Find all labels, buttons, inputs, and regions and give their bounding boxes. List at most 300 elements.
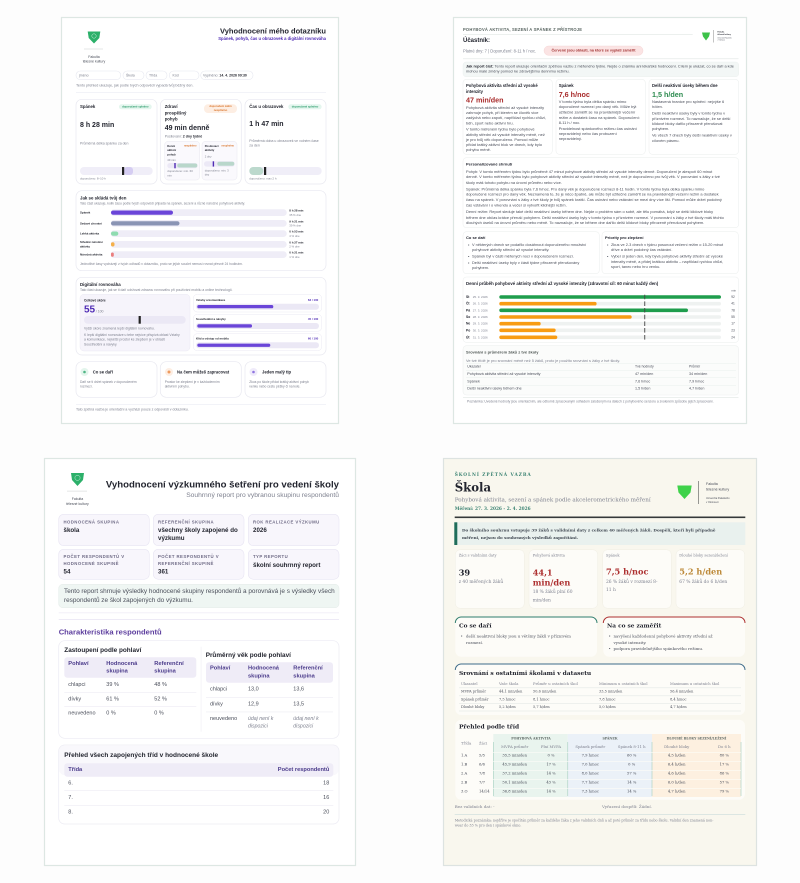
panel: personalised summary: [463, 158, 739, 228]
table: average age: dispozici: [248, 723, 269, 729]
info card: respondents in reference: POČET RESPONDENTŮ V: [158, 554, 219, 559]
table: school comparison: Průměr: [689, 364, 701, 368]
info card: year: ROK REALIZACE VÝZKUMU: [253, 520, 320, 524]
title: Škola: [455, 480, 491, 494]
card: strengths: [455, 617, 597, 657]
table: average age: dívky: [210, 702, 223, 708]
table: school comparison: Ukazatel: [467, 364, 481, 368]
bar: moderate activity: [80, 240, 304, 249]
card: physical activity: nesplněno: [214, 108, 228, 112]
table: overview by class: [455, 720, 745, 800]
table row 1.A: 1.A: [461, 754, 468, 758]
methodology note: [455, 817, 713, 827]
KPI: valid pupils: 39: [459, 567, 470, 577]
card: screen time: doporučeno: max 2 h: [249, 176, 277, 180]
KPI: sleep: Spánek: [606, 554, 620, 558]
info card: group: HODNOCENÁ SKUPINA: [64, 520, 119, 524]
sub-card: strength activity: dny: [205, 173, 210, 177]
panel: personalised summary: Spánek: Průměrná délka spánku byla 7,6 h/noc. Pro daný věk je doporučené rozmezí 8-11 hodin. V tomto týdnu byla délka spánku mimo: [466, 186, 705, 192]
table row 2.A: 2.A: [461, 772, 468, 776]
card: sleep: doporučené rozmezí pro daný věk. Může být: [559, 104, 637, 109]
subscore: relationships: 63 / 100: [308, 298, 319, 302]
bar: light activity: Lehká aktivita: [80, 232, 100, 236]
card: strengths: delší neaktivní bloky jsou u většiny žáků v příznivém: [466, 634, 571, 638]
subscore: phone distance: [193, 334, 322, 351]
table: overview by class: Plní MVPA: [541, 744, 561, 749]
how to read box: mohou malé změny pomoci ke zdravějšímu dennímu režimu.: [466, 70, 570, 74]
table: classes overview: [59, 745, 339, 824]
table: gender share: Zastoupení podle pohlaví: [64, 647, 142, 654]
chart: daily MVPA: 25. 3. 2026: [473, 295, 488, 299]
table: average age: 13,0: [248, 687, 259, 693]
title: Vyhodnocení mého dotazníku: [220, 26, 326, 36]
panel: digital balance: Tato část ukazuje, jak se ti daří udržovat zdravou rovnováhu při používání mobilu a online technologií.: [80, 288, 233, 292]
info card: respondents in group: [59, 549, 149, 579]
table row 1.A: 7,9 h/noc: [582, 754, 599, 758]
table row 1.A: 80 %: [720, 754, 729, 758]
card: sleep: Průměrná délka spánku za den: [80, 141, 128, 145]
participant: Účastník:: [463, 37, 490, 44]
table: school comparison: Delší neaktivní úseky během dne: [467, 387, 522, 391]
table row 3.O: 79 %: [720, 789, 729, 793]
card: focus areas: navýšení každodenní pohybové aktivity střední až: [614, 634, 713, 638]
table: average age: Referenční: [293, 666, 323, 672]
chart: daily MVPA: Po: [466, 328, 470, 332]
how to read box: [463, 62, 739, 77]
card: screen time: Čas u obrazovek: [249, 104, 284, 109]
card: MVPA: [463, 79, 552, 154]
card: what goes well: rozmezí.: [80, 385, 93, 389]
card: physical activity: Posilování: 2 dny týdně: [165, 135, 202, 139]
card: focus areas: •: [608, 646, 611, 651]
table: gender share: 0 %: [154, 711, 164, 717]
total score: Soustředění a návyky.: [84, 342, 117, 346]
subscore: focus: 45 / 100: [308, 317, 319, 321]
table: classes overview: Třída: [68, 767, 83, 773]
card: priorities: [602, 232, 738, 274]
table: school comparison: Pohybová aktivita střední až vysoké intenzity: [467, 372, 541, 376]
table: school comparison: 44,1 min/den: [499, 690, 523, 694]
intro text: Tento přehled ukazuje, jak podle tvých odpovědí vypadá tvůj běžný den.: [76, 84, 193, 88]
panel: device activity report: [454, 18, 746, 424]
table: average age: údaj není k: [248, 716, 274, 722]
table row 2.A: 14 %: [546, 772, 556, 776]
table: overview by class: Třída: [461, 740, 472, 746]
sub-card: daily activity: 49 min: [167, 158, 176, 162]
card: strengths: pohybové aktivity střední až vysoké intenzity.: [472, 247, 549, 252]
table row 1.A: 5/5: [479, 754, 486, 758]
card: sleep: Pravidelnost spánkového režimu čas usínání: [559, 126, 638, 131]
chart: daily MVPA: Ne: [466, 322, 470, 326]
card: MVPA: Pohybová aktivita střední až vysoké intenzity: [466, 105, 544, 110]
bar: light activity: 0 h 53 min: [289, 230, 304, 234]
card: sleep: Spánek: [559, 83, 574, 88]
title: Vyhodnocení výzkumného šetření pro vedení školy: [106, 480, 340, 490]
table: school comparison: Dlouhé bloky: [461, 705, 484, 709]
card: focus areas: •: [608, 634, 611, 638]
card: physical activity: prospěšný: [165, 110, 187, 116]
KPI: sleep: 7,5 h/noc: [606, 567, 648, 577]
table: school comparison: 4,7 h/den: [689, 387, 704, 391]
table row 3.O: 14 %: [627, 789, 637, 793]
table: school comparison: 5,2 h/den: [499, 705, 516, 709]
sub-card: daily activity: nesplněno: [184, 144, 197, 148]
panel: student questionnaire report: [62, 18, 338, 424]
chart: daily MVPA: 30. 3. 2026: [473, 328, 488, 332]
logo: faculty shield: [83, 32, 106, 63]
card: inactive blocks: příznivém rozmezí. To naznačuje, že se delší: [652, 116, 731, 121]
total score: 55: [84, 304, 96, 316]
info card: respondents in group: POČET RESPONDENTŮ V: [64, 554, 124, 559]
table row 1.B: [461, 763, 729, 767]
table: classes overview: Přehled všech zapojených tříd v hodnocené škole: [64, 752, 219, 759]
bar: vigorous activity: Náročná aktivita: [80, 253, 103, 257]
card: strengths: •: [468, 260, 470, 265]
subscore: relationships: Vztahy a komunikace: [196, 298, 226, 302]
callout: data note: Do školního souhrnu vstupuje 39 žáků s validními daty z celkem 40 měřených žáků. Dospělí, kteří byli případně: [462, 528, 716, 532]
table row 1.A: 0 %: [547, 754, 555, 758]
card: inactive blocks: Delší neaktivní úseky během dne: [652, 83, 718, 88]
summary callout: Tento report shrnuje výsledky hodnocené skupiny respondentů a porovnává je s výsledky všech: [64, 587, 335, 595]
total score: a komunikace, největší prostor ke zlepšení je v oblasti: [84, 338, 165, 342]
KPI: activity: min/den: [533, 577, 570, 587]
card: physical activity: pohyb: [165, 116, 178, 122]
sub-card: strength activity: Posilovací: [205, 144, 219, 148]
card: MVPA: intenzity: [466, 89, 484, 94]
card: strengths: pohybem.: [472, 265, 489, 270]
card: tip: Zkus po škole přidat krátký aktivní pohyb: [249, 380, 309, 384]
info card: reference group: [153, 514, 244, 546]
table row 3.O: 14/14: [479, 789, 490, 793]
card: inactive blocks: Nastavená hranice pro splnění: nejvýše 6: [652, 99, 725, 104]
KPI: valid pupils: Žáci s validními daty: [459, 553, 497, 558]
table: overview by class: Dlouhé bloky: [664, 744, 690, 749]
table: school comparison: Tvé hodnoty: [635, 364, 654, 368]
sub-card: daily activity: min: [167, 173, 172, 177]
footer note: Tato zpětná vazba je orientační a vychází pouze z odpovědí v dotazníku.: [76, 407, 189, 411]
info card: respondents in reference: REFERENČNÍ SKUPINĚ: [158, 561, 214, 566]
chart: daily MVPA: 78: [731, 308, 735, 312]
panel: personalised summary: dlouhých úseků na úrovni průměru nebo méně. To naznačuje, že se během dne dařilo delší klidové bloky přirozeně přerušovat pohybem.: [466, 220, 704, 225]
panel: day composition: [76, 191, 326, 271]
card: sleep: [76, 99, 157, 184]
table: school comparison: Spánek průměr: [461, 696, 489, 701]
panel: school feedback report: [444, 458, 756, 866]
info card: year: 2026: [253, 527, 267, 534]
card: what goes well: Daří se ti držet spánek v doporučeném: [80, 380, 137, 384]
table: school comparison: Ve tvé třídě je pro srovnání méně než 5 žáků, proto je použito srovnání s žáky z tvé školy.: [466, 358, 620, 363]
identification pills: Vyplněno: 14. 4. 2026 09:30: [203, 74, 247, 78]
identification pills: jméno: [78, 74, 89, 78]
chart: daily MVPA: Pá: [466, 308, 470, 312]
table: average age: údaj není k: [293, 716, 319, 722]
bar: moderate activity: 0 h 27 min: [289, 240, 304, 244]
card: screen time: za den: [249, 144, 260, 148]
card: focus areas: [603, 617, 745, 657]
card: physical activity: Zdraví: [165, 104, 178, 109]
card: sleep: nepravidelný.: [559, 136, 582, 141]
card: inactive blocks: klidové bloky dařilo přirozeně přerušovat: [652, 121, 723, 126]
summary callout: [59, 584, 339, 608]
card: sleep: režim a dostatek času na spánek. Doporučení:: [559, 115, 640, 120]
panel: personalised summary: denně. V tomto měřeném týdnu bylo pohybové aktivity střední až vysoké intenzity méně, než je doporučeno pro tvůj věk. V porovnání s žáky z tvé: [466, 174, 721, 179]
KPI: long blocks: 67 % žáků do 6 h/den: [679, 579, 727, 585]
card: priorities: dříve a držet podobný čas vstávání.: [611, 247, 672, 252]
logo: faculty: v Olomouci: [706, 501, 719, 504]
chart: daily MVPA: Út: [466, 334, 470, 339]
bar: sedentary: 39 % dne: [289, 224, 302, 228]
card: strengths: •: [468, 242, 470, 247]
card: strengths: •: [468, 254, 470, 258]
card: sleep: užitečné zaměřit se na pravidelnější večerní: [559, 110, 636, 114]
chart: daily MVPA: min: [731, 288, 736, 292]
table: overview by class: SPÁNEK: [602, 735, 618, 740]
info card: group: škola: [64, 527, 80, 534]
identification pills: [76, 71, 253, 80]
logo: faculty: [702, 30, 732, 42]
table: school comparison: Průměr u ostatních škol: [533, 681, 579, 686]
table: average age: neuvedeno: [210, 716, 237, 722]
card: inactive blocks: 1,5 h/den: [652, 90, 683, 99]
table: overview by class: POHYBOVÁ AKTIVITA: [511, 735, 551, 740]
table row 1.B: 0 %: [628, 763, 636, 767]
subtitle: Souhrnný report pro vybranou skupinu respondentů: [186, 491, 339, 499]
red legend pill: Červeně jsou oblasti, na které se vyplatí zaměřit: [551, 48, 636, 53]
table: classes overview: Počet respondentů: [278, 766, 330, 773]
table row 3.O: 36,8 min/den: [502, 789, 528, 793]
table row 2.A: [461, 772, 729, 776]
card: tip: [245, 362, 326, 397]
methodology note: Metodická poznámka: nejdříve je spočítán průměr za každého žáka z jeho validních dnů a až poté průměr za třídu nebo školu. Validní den znamená non-: [455, 817, 713, 822]
chart: daily MVPA: 55: [731, 315, 735, 319]
info card: report type: školní souhrnný report: [253, 562, 320, 569]
no valid data note: Bez validních dat: -: [455, 804, 495, 809]
logo: faculty: v Olomouci: [718, 40, 726, 42]
card: what to work on: Na čem můžeš zapracovat: [177, 370, 230, 374]
bar: sedentary: Sedavé chování: [80, 221, 102, 225]
bar: sleep: 8 h 28 min: [289, 208, 304, 212]
table: school comparison: Ukazatel: [461, 682, 478, 686]
card: priorities: •: [607, 254, 609, 258]
bar: light activity: [80, 230, 304, 238]
table: gender share: [64, 647, 196, 717]
table: classes overview: 6.: [68, 781, 73, 787]
table: average age: Pohlaví: [210, 666, 231, 672]
card: what to work on: Prostor ke zlepšení je v každodenním: [165, 380, 220, 384]
card: what goes well: Co se daří: [93, 370, 114, 374]
methodology note: wear do 33 % pro den i spánkové okno.: [455, 823, 521, 827]
summary callout: respondentů ze škol zapojených do výzkumu.: [64, 596, 193, 604]
table: gender share: 48 %: [154, 682, 167, 688]
info card: report type: TYP REPORTU: [253, 554, 288, 559]
card: strengths: •: [460, 634, 463, 638]
card: sleep: Spánek: [80, 104, 96, 109]
chart: daily MVPA: Denní průběh pohybové aktivity střední až vysoké intenzity (zdravotní cíl: 60 minut každý den): [466, 281, 659, 286]
total score: Celkové skóre: [84, 299, 106, 303]
KPI: sleep: [603, 550, 671, 608]
logo: faculty shield: tělesné kultury: [83, 59, 106, 63]
KPI: valid pupils: z 40 měřených žáků: [459, 579, 503, 585]
card: MVPA: běh, sport nebo aktivní hru.: [466, 120, 514, 126]
card: focus areas: Na co se zaměřit: [607, 623, 662, 630]
total score: [80, 294, 190, 351]
table: school comparison: [463, 346, 739, 395]
table: school comparison: [455, 664, 745, 715]
table: school comparison: 56,4 min/den: [670, 690, 694, 694]
logo: faculty shield: [66, 473, 89, 506]
bar: sleep: Spánek: [80, 211, 91, 215]
card: sleep: 8 h 28 min: [80, 122, 114, 129]
table: gender share: 39 %: [106, 682, 119, 688]
card: sleep: 8-11 h / noc.: [559, 120, 580, 125]
table row 2.B: 43 %: [546, 780, 556, 784]
card: MVPA: přidat krátký aktivní blok ve dnech, kdy bylo: [466, 142, 543, 147]
card: strengths: [463, 232, 599, 274]
table: average age: skupina: [293, 673, 316, 679]
panel: personalised summary: čas vstávání i o víkendu a večer si vytvořit klidnější režim.: [466, 202, 567, 208]
table: school comparison: 7,6 h/noc: [635, 379, 650, 383]
subscore: relationships: [193, 294, 322, 312]
card: priorities: Priority pro zlepšení: [605, 235, 644, 240]
panel: personalised summary: Denní režim: Report sleduje také delší neaktivní úseky během dne. Nejde o problém sám o sobě, ale tělu pomáhá, když se delší klidové bloky: [466, 209, 713, 214]
table: average age: skupina: [248, 673, 270, 679]
table: overview by class: Do 6 h: [718, 744, 731, 749]
bar: moderate activity: aktivity: [80, 245, 90, 249]
table: gender share: 61 %: [106, 696, 119, 702]
sub-card: strength activity: 2 dny: [205, 155, 212, 159]
table row 2.B: 50,1 min/den: [502, 780, 528, 784]
table: school comparison: Srovnání s průměrem žáků z tvé školy: [466, 350, 539, 354]
table: average age: 12,9: [248, 702, 259, 708]
table: gender share: Referenční: [154, 661, 184, 667]
table: classes overview: 16: [323, 795, 329, 801]
chart: daily MVPA: Čt: [466, 301, 470, 306]
table: school comparison: Maximum u ostatních škol: [670, 682, 720, 686]
card: strengths: rozmezí.: [466, 640, 483, 645]
card: priorities: Zkus ve 2-3 dnech v týdnu posunout večerní režim o 15-20 minut: [611, 242, 724, 247]
section heading: Charakteristika respondentů: [59, 628, 162, 636]
table: average age: 13,6: [293, 687, 304, 693]
card: MVPA: je pro tvůj věk doporučeno. Pomoci může: [465, 137, 539, 142]
logo: faculty: Fakulta: [706, 482, 718, 486]
total score: K lepší digitální rovnováze u tebe nejvíce přispívá oblast Vztahy: [84, 333, 180, 337]
eyebrow: ŠKOLNÍ ZPĚTNÁ VAZBA: [455, 472, 532, 478]
table row 2.A: 7/8: [479, 772, 486, 776]
table: classes overview: 18: [323, 781, 329, 787]
subtitle: Pohybová aktivita, sezení a spánek podle akcelerometrického měření: [455, 497, 651, 504]
table row 3.O: 14 %: [546, 789, 556, 793]
bar: vigorous activity: 0 h 21 min: [289, 251, 304, 255]
info card: respondents in group: 54: [64, 568, 71, 576]
table: gender share: 0 %: [106, 711, 116, 717]
KPI: long blocks: 5,2 h/den: [679, 567, 722, 577]
KPI: activity: Pohybová aktivita: [533, 554, 566, 558]
card: sleep: nepravidelný nebo čas probuzení: [559, 131, 618, 136]
card: MVPA: Pohybová aktivita střední až vysoké: [466, 83, 538, 88]
chart: daily MVPA: 23: [731, 328, 735, 332]
card: strengths: Co se daří: [459, 623, 492, 630]
card: tip: venku nebo cestu pěšky či na kole.: [249, 385, 301, 389]
table row 1.B: 1.B: [461, 763, 468, 767]
chart: daily MVPA: 27. 3. 2026: [473, 308, 488, 312]
card: focus areas: vysoké intenzity.: [612, 640, 646, 645]
table: gender share: skupina: [154, 668, 177, 674]
logo: faculty: tělesné kultury: [706, 487, 729, 491]
table row 3.O: 4,7 h/den: [668, 789, 686, 793]
bar: sleep: [80, 208, 304, 217]
chart: daily MVPA: 92: [731, 295, 735, 299]
chart: daily MVPA: 24: [731, 335, 735, 339]
report heading: POHYBOVÁ AKTIVITA, SEZENÍ A SPÁNEK Z PŘÍSTROJE: [463, 27, 582, 32]
panel: personalised summary: Personalizované shrnutí: [466, 162, 513, 166]
bar: light activity: 4 % dne: [289, 234, 300, 238]
card: MVPA: aktivity střední až vysoké intenzity méně, než: [466, 132, 545, 137]
KPI: sleep: 11 h: [606, 588, 616, 593]
table row 1.B: 45,9 min/den: [502, 763, 528, 767]
how to read box: Jak report číst: Tento report ukazuje orientační zpětnou vazbu z měřeného týdne. Nejde o známku ani lékařské hodnocení. Cílem je ukázat, co se daří a kde: [466, 65, 734, 69]
logo: faculty: Univerzita Palackého: [706, 497, 730, 500]
table: school comparison: 5,0 h/den: [599, 705, 616, 709]
excluded adults note: Vyřazení dospělí: Žádní.: [601, 804, 652, 809]
info card: reference group: všechny školy zapojené do: [158, 527, 238, 534]
measurement dates: Měření: 27. 3. 2026 - 2. 4. 2026: [455, 507, 531, 512]
logo: faculty: Univerzita Palackého: [718, 36, 732, 40]
chart: daily MVPA: [463, 277, 739, 342]
panel: personalised summary: během dne občas krátce přeruší pohybem. Delší neaktivní úseky byly v tomto týdnu v příznivém rozmezí. V porovnání s žáky z tvé školy máš těchto: [466, 215, 725, 220]
logo: faculty: [677, 481, 730, 504]
bar: vigorous activity: 1 % dne: [289, 255, 300, 259]
table row 1.B: 6/6: [479, 763, 486, 767]
table: school comparison: 33,5 min/den: [599, 690, 623, 694]
sub-card: daily activity: doporučeno: min. 60: [167, 169, 193, 173]
card: strengths: Delší neaktivní úseky byly v části týdne přirozeně přerušovány: [472, 260, 579, 265]
identification pills: Kód: [172, 74, 179, 78]
table: gender share: dívky: [68, 696, 81, 702]
red legend pill: [544, 46, 643, 55]
card: inactive blocks: pohybem.: [652, 126, 669, 131]
bar: sedentary: [80, 219, 304, 228]
table: gender share: Pohlaví: [68, 661, 89, 667]
card: MVPA: 47 min/den: [466, 96, 504, 104]
card: tip: Jeden malý tip: [262, 370, 292, 374]
card: MVPA: zahrnuje pohyb, při kterém se člověk více: [466, 110, 539, 115]
chart: daily MVPA: 17: [731, 322, 735, 326]
table: school comparison: 8,1 h/noc: [533, 697, 549, 701]
panel: respondent tables: [59, 641, 339, 738]
table row 1.B: 17 %: [546, 763, 556, 767]
card: MVPA: pohybu méně.: [466, 147, 491, 152]
card: strengths: V některých dnech se podařilo dosáhnout doporučeného množství: [472, 242, 587, 247]
table row 1.B: 7,0 h/noc: [582, 763, 599, 767]
table: classes overview: 7.: [68, 795, 73, 801]
card: MVPA: zadýchá nebo zapotí, například rychlou chůzi,: [466, 115, 546, 120]
info card: report type: [248, 549, 339, 579]
chart: daily MVPA: So: [466, 315, 470, 319]
table: gender share: Hodnocená: [106, 661, 138, 667]
callout: data note: [454, 522, 745, 545]
card: inactive blocks: [649, 79, 739, 154]
card: inactive blocks: h/den.: [652, 104, 663, 109]
KPI: sleep: 26 % žáků v rozmezí 8-: [606, 579, 658, 585]
table row 2.A: 57 %: [627, 772, 637, 776]
card: screen time: doporučené splněno: [292, 104, 319, 108]
bar: moderate activity: 2 % dne: [289, 245, 300, 249]
table: school comparison: 5,7 h/den: [533, 705, 550, 709]
table row 1.A: 35,5 min/den: [502, 754, 528, 758]
table row 2.A: 4,6 h/den: [668, 772, 686, 776]
table: overview by class: DLOUHÉ BLOKY SEZENÍ/LEŽENÍ: [667, 735, 727, 740]
table row 2.B: 2.B: [461, 780, 468, 784]
